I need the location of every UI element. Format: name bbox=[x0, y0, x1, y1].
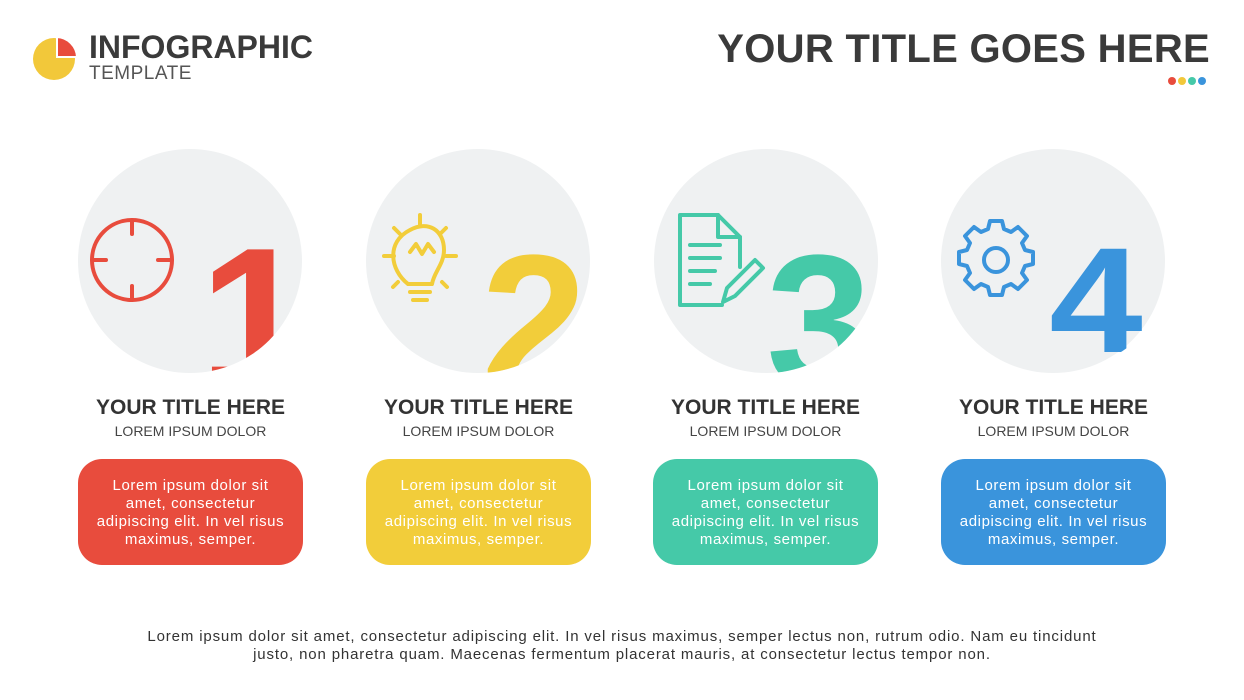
step 3 texts: adipiscing elit. In vel risus bbox=[672, 513, 859, 530]
step 3 texts: Lorem ipsum dolor sit bbox=[688, 477, 844, 494]
step 2 circle bbox=[366, 149, 590, 373]
step 2 texts: YOUR TITLE HERE bbox=[384, 396, 573, 419]
step 1 texts: adipiscing elit. In vel risus bbox=[97, 513, 284, 530]
footer text: justo, non pharetra quam. Maecenas fermentum placerat mauris, at consectetur lectus tempor non. bbox=[253, 646, 991, 663]
step 1 texts: Lorem ipsum dolor sit bbox=[112, 477, 268, 494]
circles with numbers and icons bbox=[78, 149, 1165, 373]
step 3 texts: amet, consectetur bbox=[701, 495, 830, 512]
icon: target bbox=[92, 220, 172, 300]
step 4 texts: Lorem ipsum dolor sit bbox=[976, 477, 1132, 494]
step 4 texts: LOREM IPSUM DOLOR bbox=[978, 423, 1129, 439]
step 3 texts bbox=[653, 396, 878, 565]
step 2 texts: LOREM IPSUM DOLOR bbox=[403, 423, 554, 439]
step 1 texts: amet, consectetur bbox=[126, 495, 255, 512]
step 1 circle bbox=[78, 149, 302, 373]
step 3 texts: maximus, semper. bbox=[700, 531, 831, 548]
step 2 texts bbox=[366, 396, 591, 565]
step 2 texts: Lorem ipsum dolor sit bbox=[400, 477, 556, 494]
logo text bbox=[89, 29, 313, 84]
step 3 texts: LOREM IPSUM DOLOR bbox=[690, 423, 841, 439]
step 1 texts: LOREM IPSUM DOLOR bbox=[115, 423, 266, 439]
step 4 texts: adipiscing elit. In vel risus bbox=[960, 513, 1147, 530]
step 4 texts: YOUR TITLE HERE bbox=[959, 396, 1148, 419]
step 1 texts bbox=[78, 396, 303, 565]
step 4 texts: maximus, semper. bbox=[988, 531, 1119, 548]
icon: pie chart bbox=[33, 38, 76, 80]
logo text: TEMPLATE bbox=[89, 63, 192, 84]
step 1 texts: YOUR TITLE HERE bbox=[96, 396, 285, 419]
title: YOUR TITLE GOES HERE bbox=[717, 27, 1210, 71]
icon: lightbulb bbox=[384, 215, 456, 300]
step 4 texts: amet, consectetur bbox=[989, 495, 1118, 512]
step 4 texts bbox=[941, 396, 1166, 565]
icon: document with pencil bbox=[680, 215, 763, 305]
step 2 texts: adipiscing elit. In vel risus bbox=[385, 513, 572, 530]
title dots bbox=[1168, 77, 1206, 85]
step 3 texts: YOUR TITLE HERE bbox=[671, 396, 860, 419]
step 4 circle: 4 bbox=[1049, 216, 1143, 384]
icon: gear bbox=[959, 221, 1033, 295]
logo bbox=[33, 29, 313, 84]
step 2 texts: amet, consectetur bbox=[414, 495, 543, 512]
footer text: Lorem ipsum dolor sit amet, consectetur adipiscing elit. In vel risus maximus, semper lectus non, rutrum odio. Nam eu tincidunt bbox=[147, 628, 1097, 645]
step 4 circle bbox=[941, 149, 1165, 384]
logo text: INFOGRAPHIC bbox=[89, 29, 313, 65]
step 2 texts: maximus, semper. bbox=[413, 531, 544, 548]
step 3 circle bbox=[654, 149, 878, 373]
footer text bbox=[147, 628, 1097, 663]
step 1 texts: maximus, semper. bbox=[125, 531, 256, 548]
